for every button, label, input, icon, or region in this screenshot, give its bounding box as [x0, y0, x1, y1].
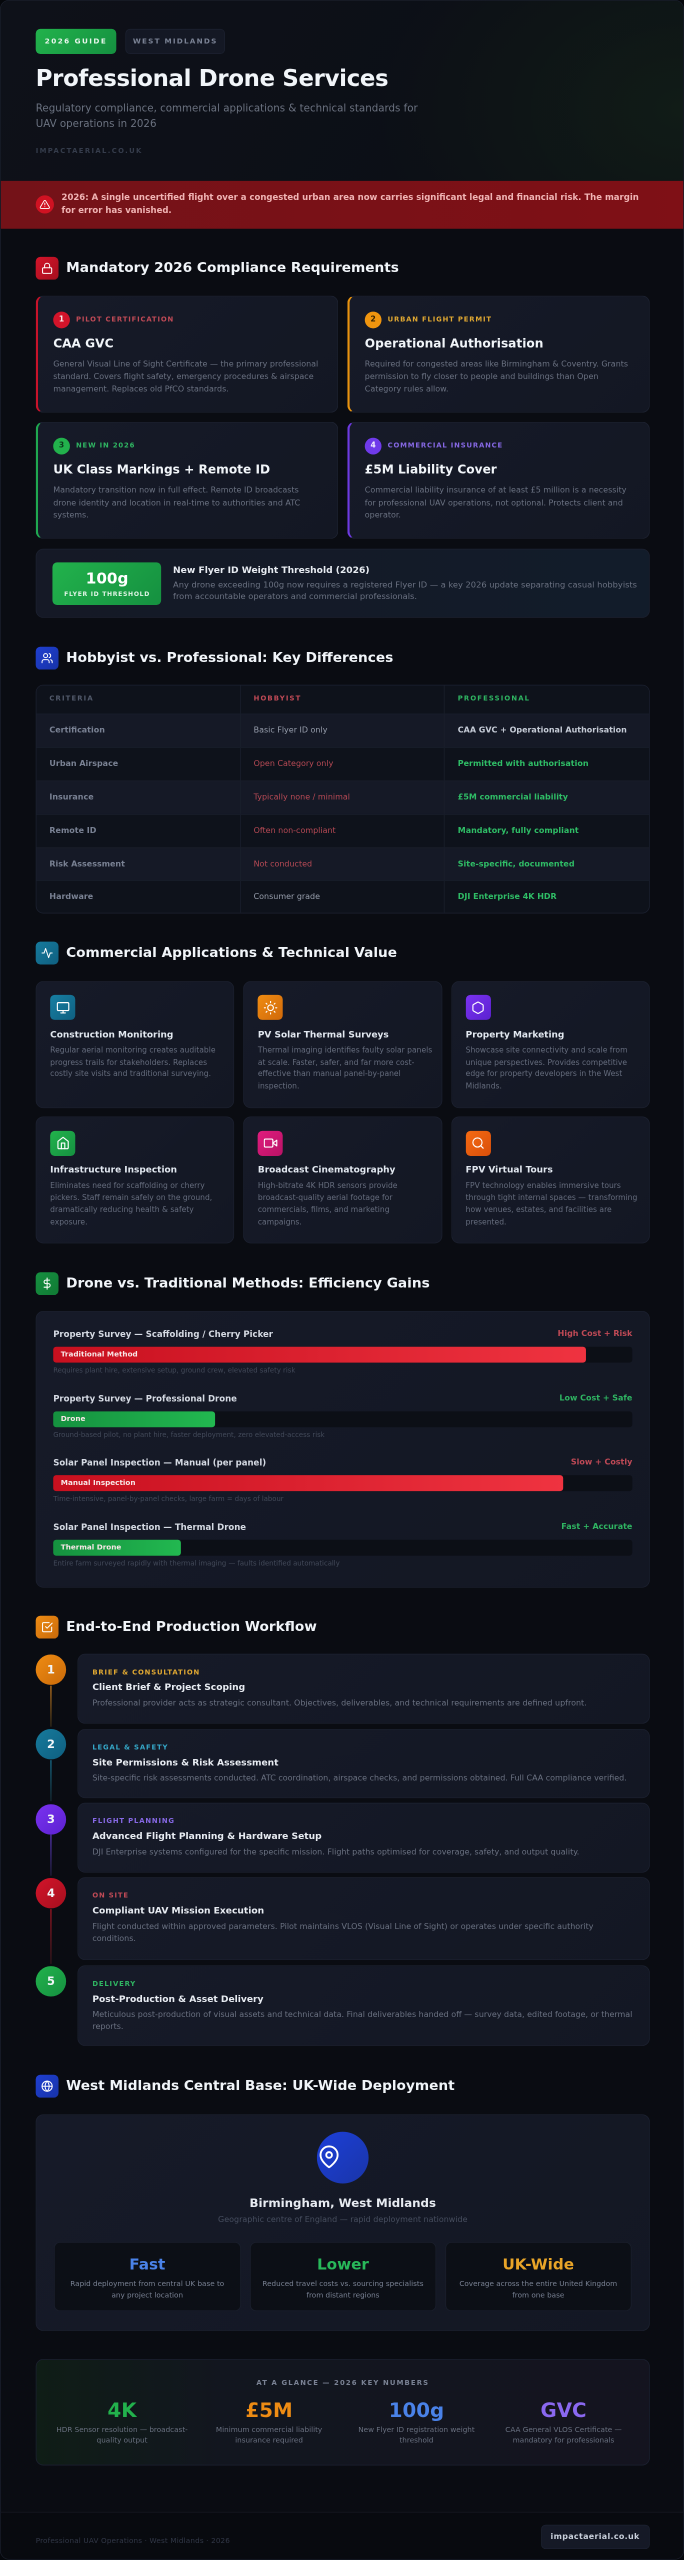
bar verdict: High Cost + Risk	[558, 1329, 632, 1338]
step text: Site-specific risk assessments conducted. ATC coordination, airspace checks, and permissions obtained. Full CAA compliance verified.	[92, 1774, 627, 1783]
benefit text	[70, 2280, 224, 2300]
card body: Mandatory transition now in full effect. Remote ID broadcasts	[53, 486, 299, 495]
app text	[50, 1182, 212, 1226]
card body	[365, 359, 628, 394]
stat value: £5M	[245, 2399, 293, 2422]
bar track: Drone	[61, 1415, 85, 1423]
stat: 4k	[56, 2399, 188, 2445]
step text: Meticulous post-production of visual assets and technical data. Final deliverables handed off — survey data, edited footage, or thermal	[92, 2010, 632, 2019]
step 1 card	[77, 1654, 650, 1724]
app text: FPV technology enables immersive tours	[466, 1182, 621, 1190]
stat text	[56, 2426, 188, 2445]
stat text	[216, 2426, 322, 2445]
card body: Required for congested areas like Birmingham & Coventry. Grants	[365, 359, 628, 369]
card body: standard. Covers flight safety, emergency procedures & airspace	[53, 372, 314, 381]
step 4 marker	[36, 1878, 66, 1909]
subtitle: Regulatory compliance, commercial applications & technical standards for	[36, 103, 418, 115]
stat box: 100g	[53, 562, 161, 605]
benefit value: Fast	[129, 2255, 165, 2273]
subtitle	[36, 103, 418, 130]
bar row: thermal drone	[53, 1522, 632, 1568]
location circle	[317, 2132, 369, 2183]
card: urban flight permit	[347, 296, 650, 413]
benefit text	[459, 2280, 617, 2300]
number badge: 4	[371, 442, 376, 450]
bar note: Entire farm surveyed rapidly with thermal imaging — faults identified automatically	[53, 1560, 340, 1568]
step title: Site Permissions & Risk Assessment	[92, 1757, 279, 1768]
icon: video	[258, 1131, 283, 1156]
app text: inspection.	[258, 1082, 299, 1091]
step text: Flight conducted within approved parameters. Pilot maintains VLOS (Visual Line of Sight) or operates under specific authority	[92, 1922, 594, 1931]
step title: Advanced Flight Planning & Hardware Setup	[92, 1831, 322, 1842]
number badge	[365, 312, 382, 328]
heading text: West Midlands Central Base: UK-Wide Deployment	[66, 2078, 455, 2094]
threshold text: from accountable operators and commercial professionals.	[173, 592, 417, 602]
app text	[50, 1046, 216, 1079]
value caption: FLYER ID THRESHOLD	[64, 590, 150, 597]
stat value: 4K	[108, 2399, 137, 2422]
subtitle: UAV operations in 2026	[36, 118, 156, 130]
stat text	[358, 2426, 475, 2445]
row: hardware: DJI Enterprise 4K HDR	[458, 893, 557, 902]
bar track: Thermal Drone	[61, 1543, 121, 1552]
footer site pill	[541, 2524, 649, 2549]
table header row: PROFESSIONAL	[458, 696, 530, 703]
app card: infrastructure inspection	[36, 1117, 234, 1244]
heading text: Commercial Applications & Technical Value	[66, 945, 397, 961]
number badge	[365, 438, 382, 455]
step title: Post-Production & Asset Delivery	[92, 1993, 264, 2004]
bar label: Property Survey — Professional Drone	[53, 1394, 237, 1403]
step 1 marker	[36, 1655, 66, 1685]
base subtitle: Geographic centre of England — rapid deployment nationwide	[218, 2215, 467, 2224]
heading text: Drone vs. Traditional Methods: Efficiency Gains	[66, 1275, 430, 1291]
row: urban airspace: Permitted with authorisation	[458, 759, 589, 769]
app text: effective than manual panel-by-panel	[258, 1070, 401, 1079]
benefit: fast	[54, 2242, 241, 2311]
stat: 100g	[358, 2399, 475, 2445]
benefit text: from one base	[512, 2292, 564, 2300]
app text: Showcase site connectivity and scale from	[466, 1046, 627, 1055]
row: hardware: Hardware	[49, 893, 93, 902]
app title: FPV Virtual Tours	[466, 1165, 553, 1175]
number badge	[53, 438, 70, 455]
card body: Commercial liability insurance of at least £5 million is a necessity	[365, 486, 626, 495]
benefit text: any project location	[111, 2292, 183, 2300]
bar note: Requires plant hire, extensive setup, ground crew, elevated safety risk	[53, 1367, 295, 1375]
bar row: professional drone	[53, 1394, 632, 1439]
icon: dollar	[36, 1272, 59, 1295]
row: certification: Certification	[49, 726, 105, 735]
alert text: for error has vanished.	[62, 205, 172, 215]
stat value: GVC	[541, 2399, 587, 2422]
app text: Regular aerial monitoring creates auditable	[50, 1046, 216, 1055]
bar label: Solar Panel Inspection — Manual (per panel)	[53, 1458, 266, 1468]
section heading: compliance	[36, 256, 399, 280]
panel: bar chart comparison	[36, 1311, 650, 1587]
icon: lock	[36, 257, 59, 280]
tag: 2026 guide	[36, 29, 116, 54]
row: certification	[36, 714, 649, 747]
site url: IMPACTAERIAL.CO.UK	[36, 147, 143, 155]
row: urban airspace	[36, 747, 649, 781]
connector 1	[50, 1686, 52, 1727]
card body: Category rules allow.	[365, 385, 448, 394]
app title: Property Marketing	[466, 1029, 564, 1040]
app text: broadcast-quality aerial footage for	[258, 1194, 392, 1202]
app text: presented.	[466, 1218, 506, 1226]
card body: systems.	[53, 511, 89, 520]
card label: NEW IN 2026	[76, 443, 135, 450]
stat text: Minimum commercial liability	[216, 2426, 322, 2434]
threshold text: Any drone exceeding 100g now requires a registered Flyer ID — a key 2026 update separating casual hobbyists	[173, 580, 637, 590]
panel: flyer id threshold	[36, 549, 650, 618]
card body	[53, 486, 300, 520]
tag: 2026 guide: 2026 GUIDE	[45, 37, 107, 46]
row: remote id: Often non-compliant	[254, 826, 336, 835]
step title: Client Brief & Project Scoping	[92, 1682, 245, 1693]
step 1 marker: 1	[47, 1663, 55, 1677]
row: risk assessment: Not conducted	[254, 859, 312, 868]
card body: for professional UAV operations, not optional. Protects client and	[365, 498, 623, 508]
section heading: hobbyist vs professional	[36, 646, 393, 670]
title: Professional Drone Services	[36, 65, 388, 92]
section heading: efficiency gains	[36, 1272, 430, 1295]
footer text: Professional UAV Operations · West Midlands · 2026	[36, 2537, 230, 2545]
card body: General Visual Line of Sight Certificate — the primary professional	[53, 359, 318, 369]
row: remote id: Remote ID	[49, 826, 96, 835]
app text: Eliminates need for scaffolding or cherry	[50, 1182, 205, 1190]
row: hardware: Consumer grade	[254, 893, 320, 902]
row: remote id: Mandatory, fully compliant	[458, 826, 579, 835]
alert text: 2026: A single uncertified flight over a congested urban area now carries significant legal and financial risk. The margin	[62, 192, 639, 202]
app text: High-bitrate 4K HDR sensors provide	[258, 1182, 397, 1190]
app text: at scale. Faster, safer, and far more cost-	[258, 1058, 414, 1067]
alert banner	[1, 181, 684, 229]
icon: globe	[36, 2075, 59, 2098]
bar track	[53, 1411, 632, 1427]
tag: west midlands: WEST MIDLANDS	[133, 37, 217, 46]
stat value: 100g	[389, 2399, 444, 2422]
bar track	[53, 1475, 632, 1491]
heading text: End-to-End Production Workflow	[66, 1618, 317, 1634]
benefit text: Coverage across the entire United Kingdom	[459, 2280, 617, 2289]
app text: campaigns.	[258, 1218, 302, 1226]
table header row	[36, 686, 649, 714]
step label: BRIEF & CONSULTATION	[92, 1669, 200, 1677]
card label: URBAN FLIGHT PERMIT	[388, 316, 492, 324]
bar row: scaffolding	[53, 1329, 632, 1375]
step 3 marker: 3	[47, 1812, 55, 1826]
app text: unique perspectives. Provides competitive	[466, 1058, 627, 1067]
step 3 card	[77, 1803, 650, 1873]
bar track	[53, 1346, 632, 1362]
step text	[92, 2010, 632, 2032]
card body: management. Replaces old PfCO standards.	[53, 385, 229, 394]
tag: west midlands	[125, 29, 225, 54]
header band	[1, 1, 684, 181]
app text: Midlands.	[466, 1082, 502, 1091]
step text: conditions.	[92, 1934, 136, 1944]
stat text: CAA General VLOS Certificate —	[505, 2426, 622, 2434]
heading text: Hobbyist vs. Professional: Key Differences	[66, 649, 393, 665]
stat text	[505, 2426, 622, 2445]
step text: Professional provider acts as strategic consultant. Objectives, deliverables, and technical requirements are defined upfront.	[92, 1699, 587, 1708]
row: remote id	[36, 814, 649, 847]
step label: LEGAL & SAFETY	[92, 1744, 168, 1752]
row: insurance: £5M commercial liability	[458, 793, 568, 802]
card label: COMMERCIAL INSURANCE	[388, 443, 503, 450]
app title: Broadcast Cinematography	[258, 1165, 395, 1175]
benefit text	[262, 2280, 424, 2300]
app text: exposure.	[50, 1218, 88, 1226]
benefit text: from distant regions	[306, 2292, 379, 2300]
row: certification: Basic Flyer ID only	[254, 726, 327, 735]
bar track: Traditional Method	[61, 1350, 138, 1359]
app text	[258, 1182, 397, 1226]
app card: fpv virtual tours	[451, 1117, 650, 1244]
bar note: Ground-based pilot, no plant hire, faster deployment, zero elevated-access risk	[53, 1432, 325, 1439]
app card: construction monitoring	[36, 981, 234, 1108]
stat: 5m	[216, 2399, 322, 2445]
app text: how venues, estates, and facilities are	[466, 1206, 612, 1214]
connector 4	[50, 1909, 52, 1964]
app text: pickers. Staff remain safely on the ground,	[50, 1194, 212, 1202]
bar track	[53, 1540, 632, 1555]
row: urban airspace: Open Category only	[254, 759, 333, 769]
step 5 marker	[36, 1966, 66, 1996]
card title: £5M Liability Cover	[365, 462, 497, 477]
row: certification: CAA GVC + Operational Authorisation	[458, 726, 627, 735]
card: new in 2026	[36, 422, 338, 539]
app title: Construction Monitoring	[50, 1029, 173, 1040]
card label: PILOT CERTIFICATION	[76, 316, 174, 324]
comparison table	[36, 685, 650, 913]
app card: pv solar thermal	[243, 981, 442, 1108]
benefit: lower	[250, 2242, 436, 2311]
panel heading: AT A GLANCE — 2026 KEY NUMBERS	[256, 2380, 429, 2387]
card body	[364, 486, 626, 520]
table header row: CRITERIA	[49, 696, 94, 703]
step 5 marker: 5	[47, 1974, 55, 1988]
bar track: Manual Inspection	[61, 1479, 135, 1487]
stat text: quality output	[97, 2437, 147, 2445]
step 5 card	[77, 1965, 650, 2046]
step 2 card	[77, 1729, 650, 1798]
app card: property marketing	[451, 981, 650, 1108]
stat text: HDR Sensor resolution — broadcast-	[56, 2426, 188, 2434]
threshold title: New Flyer ID Weight Threshold (2026)	[173, 564, 370, 575]
card title: Operational Authorisation	[365, 336, 543, 350]
app text	[466, 1046, 627, 1091]
number badge: 1	[59, 315, 64, 324]
stat text: New Flyer ID registration weight	[358, 2426, 475, 2434]
bar verdict: Slow + Costly	[571, 1458, 632, 1467]
bar note: Time-intensive, panel-by-panel checks, large farm = days of labour	[53, 1496, 284, 1503]
card title: UK Class Markings + Remote ID	[53, 462, 270, 477]
footer	[1, 2512, 684, 2560]
panel: key numbers	[36, 2359, 650, 2465]
icon: users	[36, 646, 59, 669]
icon: map pin	[320, 2146, 339, 2168]
card: commercial insurance	[347, 422, 650, 539]
icon: warning triangle	[36, 195, 54, 214]
heading text: Mandatory 2026 Compliance Requirements	[66, 260, 399, 276]
section heading: west midlands base	[36, 2074, 455, 2098]
icon: check square	[36, 1615, 59, 1638]
step text	[92, 1922, 594, 1944]
bar row: manual inspection	[53, 1458, 632, 1503]
row: risk assessment: Risk Assessment	[49, 859, 125, 868]
benefit value: Lower	[317, 2255, 369, 2273]
row: insurance: Insurance	[49, 793, 94, 802]
connector 3	[50, 1835, 52, 1876]
row: urban airspace: Urban Airspace	[49, 759, 118, 769]
step label: FLIGHT PLANNING	[92, 1818, 175, 1826]
bar verdict: Low Cost + Safe	[559, 1394, 632, 1403]
app text	[258, 1046, 432, 1091]
card body: drone identity and location in real-time to authorities and ATC	[53, 498, 300, 508]
benefit: uk-wide	[445, 2242, 632, 2311]
app text: costly site visits and traditional surveying.	[50, 1070, 211, 1079]
stat text: mandatory for professionals	[513, 2437, 614, 2445]
benefit text: Reduced travel costs vs. sourcing specialists	[262, 2280, 423, 2289]
card body: permission to fly closer to people and buildings than Open	[365, 372, 598, 381]
benefit text: Rapid deployment from central UK base to	[70, 2280, 224, 2289]
app text: dramatically reducing health & safety	[50, 1206, 194, 1214]
stat text: insurance required	[235, 2437, 303, 2445]
app title: PV Solar Thermal Surveys	[258, 1029, 389, 1040]
base title: Birmingham, West Midlands	[250, 2196, 436, 2210]
step 4 marker: 4	[47, 1886, 55, 1900]
app card: broadcast cinematography	[243, 1117, 442, 1244]
app text: commercials, films, and marketing	[258, 1206, 390, 1214]
bar label: Property Survey — Scaffolding / Cherry Picker	[53, 1329, 273, 1339]
icon: monitor	[50, 995, 75, 1020]
bar label: Solar Panel Inspection — Thermal Drone	[53, 1522, 246, 1532]
app title: Infrastructure Inspection	[50, 1165, 177, 1175]
icon: activity	[36, 942, 59, 965]
step text: reports.	[92, 2023, 123, 2032]
number badge	[53, 312, 70, 328]
icon: sun	[258, 995, 283, 1020]
row: hardware	[36, 880, 649, 914]
step text: DJI Enterprise systems configured for the specific mission. Flight paths optimised for coverage, safety, and output quality.	[92, 1848, 579, 1857]
stat: gvc	[505, 2399, 622, 2445]
card: pilot certification	[36, 296, 338, 413]
stat text: threshold	[399, 2437, 433, 2445]
card body	[53, 359, 318, 394]
table header row: HOBBYIST	[254, 696, 301, 703]
connector 2	[50, 1760, 52, 1801]
step label: DELIVERY	[92, 1980, 136, 1988]
number badge: 2	[371, 315, 376, 324]
card body: operator.	[365, 511, 401, 520]
row: insurance: Typically none / minimal	[254, 793, 350, 802]
bar verdict: Fast + Accurate	[561, 1522, 632, 1531]
section heading: workflow	[36, 1616, 317, 1638]
step 3 marker	[36, 1804, 66, 1834]
step 2 marker	[36, 1729, 66, 1760]
section heading: commercial applications	[36, 942, 397, 964]
app text: Thermal imaging identifies faulty solar panels	[258, 1046, 432, 1055]
icon: hexagon	[466, 995, 491, 1020]
icon: search	[466, 1131, 491, 1156]
app text	[466, 1182, 637, 1226]
step title: Compliant UAV Mission Execution	[92, 1905, 264, 1916]
app text: through tight internal spaces — transforming	[466, 1194, 637, 1202]
panel: central base	[36, 2114, 650, 2331]
app text: progress trails for stakeholders. Replaces	[50, 1058, 207, 1067]
row: risk assessment	[36, 847, 649, 880]
threshold text	[173, 580, 637, 602]
row: risk assessment: Site-specific, documented	[458, 859, 575, 868]
step 4 card	[77, 1877, 650, 1960]
card title: CAA GVC	[53, 336, 114, 350]
app text: edge for property developers in the West	[466, 1070, 622, 1079]
step 2 marker: 2	[47, 1738, 55, 1751]
benefit value: UK-Wide	[502, 2255, 574, 2273]
alert text	[62, 192, 639, 215]
footer site pill: impactaerial.co.uk	[551, 2532, 640, 2541]
row: insurance	[36, 781, 649, 814]
number badge: 3	[59, 442, 64, 450]
step label: ON SITE	[92, 1892, 129, 1900]
value: 100g	[86, 569, 128, 587]
icon: home	[50, 1131, 75, 1156]
